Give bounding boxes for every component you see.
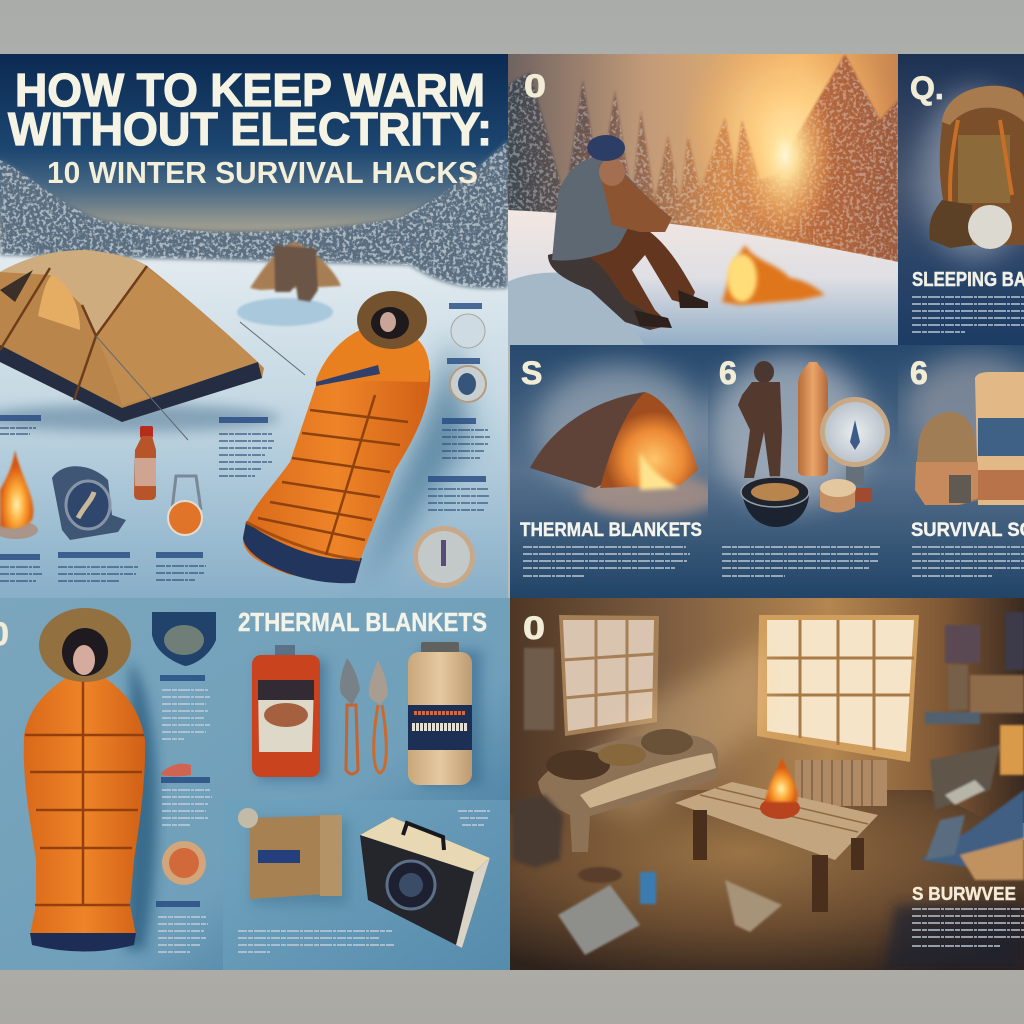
small label	[458, 811, 490, 825]
icon: cylinder	[798, 362, 828, 476]
illustration: large tent	[0, 250, 305, 440]
panel: thermal blankets	[510, 345, 720, 598]
illustration: couch	[538, 729, 718, 852]
illustration: blanket stack	[920, 790, 1024, 880]
illustration: wall poster	[524, 648, 554, 730]
text block: bag note two	[161, 764, 212, 825]
panel: warm room	[510, 598, 1024, 970]
illustration: seated person	[508, 135, 708, 345]
icon: badge shield	[152, 612, 216, 666]
icon: flame	[0, 450, 38, 539]
icon: badge two	[447, 361, 486, 402]
icon: bottle	[134, 426, 156, 500]
illustration: wooden table	[675, 782, 878, 912]
illustration: orange sleeping bag	[243, 291, 470, 590]
illustration: backpack	[929, 86, 1024, 249]
text block: survival copy	[912, 547, 1024, 576]
text block: right note one	[442, 421, 490, 458]
text block: thermal blankets copy	[523, 547, 690, 576]
illustration: distant tent	[237, 242, 341, 326]
text block: supplies copy	[238, 931, 394, 952]
number marker: 6	[910, 355, 928, 391]
illustration: right window	[757, 615, 919, 762]
icon: round badge	[162, 841, 206, 885]
icon: cork jar	[408, 642, 482, 786]
icon: tan wallet	[238, 808, 348, 905]
icon: carabiner pouch	[168, 476, 202, 535]
number marker: 6	[719, 355, 737, 391]
icon: black case with fan	[360, 817, 490, 948]
text block: center note	[219, 420, 274, 476]
text block: right note two	[428, 479, 490, 510]
icon: table flame	[760, 758, 800, 819]
text block: gauge copy	[722, 547, 880, 576]
icon: round gauge	[820, 397, 890, 485]
text block: lower note two	[58, 555, 138, 581]
number marker: 0	[523, 610, 545, 646]
illustration: radiator	[795, 760, 887, 806]
light beam	[560, 640, 770, 820]
illustration: forest silhouettes	[508, 54, 898, 262]
icon: red flask	[252, 645, 326, 780]
illustration: supply box	[975, 372, 1024, 505]
text block: bag note three	[156, 904, 208, 952]
text block: lower note one	[0, 557, 42, 581]
heading: thermal blankets: THERMAL BLANKETS	[520, 520, 702, 541]
heading: title	[7, 72, 488, 184]
panel: sunset campfire	[508, 54, 898, 345]
text block: sleeping bag copy	[912, 297, 1024, 332]
icon: survival tools	[340, 658, 388, 774]
panel: backpack	[898, 54, 1024, 345]
number marker: 0	[524, 68, 546, 104]
text block background and heading	[885, 884, 1024, 970]
text block background and heading: S BURWVEE	[912, 884, 1016, 904]
text block: left note	[0, 418, 41, 434]
text block: bag note one	[160, 678, 210, 739]
number marker: Q.	[910, 70, 944, 106]
panel: title and snowy camp	[0, 54, 508, 598]
icon: badge one	[449, 306, 485, 348]
icon: campfire	[722, 245, 825, 305]
heading: title: HOW TO KEEP WARM	[15, 64, 485, 116]
snowy tree line	[0, 140, 508, 288]
illustration: glowing tent	[530, 392, 698, 490]
text block: lower note three	[156, 555, 206, 580]
heading: title: 10 WINTER SURVIVAL HACKS	[47, 155, 478, 190]
panel: sleeping bag and supplies	[0, 598, 510, 970]
panel: person and gauge	[708, 345, 898, 598]
icon: rolled blanket	[52, 466, 126, 540]
icon: pot	[741, 477, 809, 527]
illustration: standing person	[738, 361, 782, 478]
illustration: rolled bag	[915, 412, 978, 505]
heading: thermal blankets number two: 2THERMAL BLANKETS	[238, 607, 487, 637]
illustration: shelves of supplies	[925, 612, 1024, 810]
illustration: left bag pile	[512, 795, 563, 868]
icon: temperature gauge	[413, 526, 475, 588]
illustration: orange bag with hood	[24, 608, 157, 952]
illustration: floor clutter	[558, 867, 782, 955]
heading: title: WITHOUT ELECTRITY:	[8, 103, 492, 155]
panel: survival kit	[898, 345, 1024, 598]
number marker: S	[521, 355, 542, 391]
icon: tub	[820, 479, 872, 512]
illustration: left window	[559, 615, 659, 736]
